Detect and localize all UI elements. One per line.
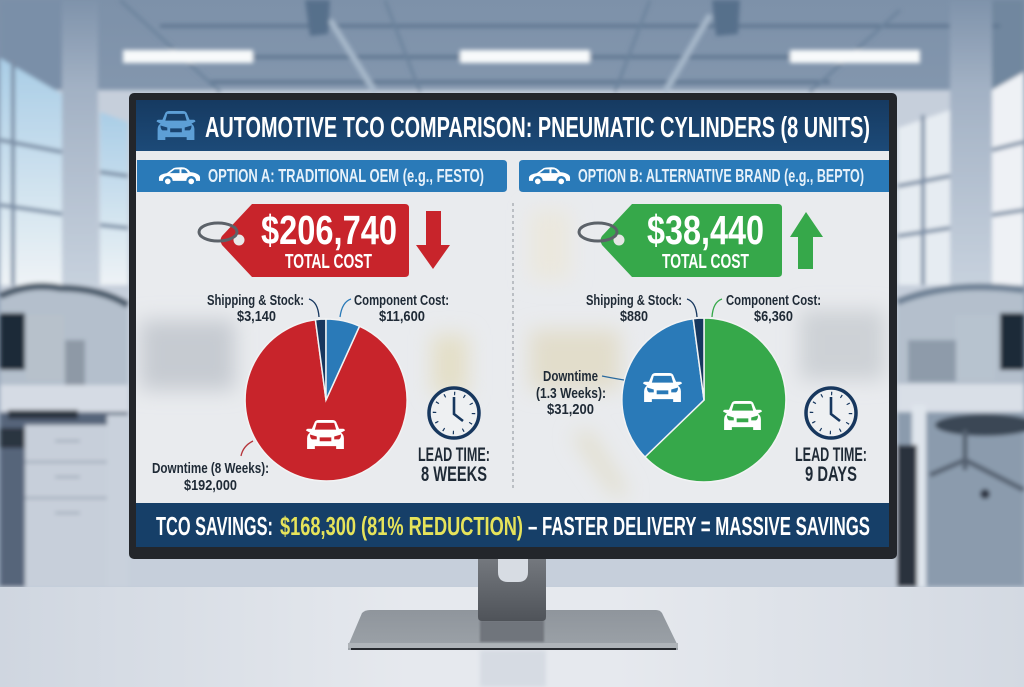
desk surface: [0, 587, 1024, 687]
pie B labels: Component Cost:: [726, 293, 821, 309]
pie A labels: Component Cost:: [354, 293, 449, 309]
pie B labels: $880: [620, 309, 648, 325]
clock A: [429, 388, 479, 438]
pie chart A: [245, 319, 407, 481]
monitor stand and base: [348, 559, 678, 650]
clock B: [806, 388, 856, 438]
lead time B: [795, 445, 867, 486]
pie A labels: $3,140: [237, 309, 276, 325]
lead time A: LEAD TIME:: [418, 445, 490, 466]
icon: sedan A: [159, 167, 200, 185]
panel header: option B: [519, 160, 889, 192]
icon: car front: [157, 111, 195, 140]
screen background: blurred assembly line: [136, 151, 889, 503]
price tag A: $206,740: [261, 207, 397, 253]
pie A labels: $192,000: [184, 478, 237, 494]
pie B labels: [536, 293, 821, 418]
pie chart B: [622, 318, 786, 482]
pie B labels: (1.3 Weeks):: [536, 386, 606, 402]
lead time A: 8 WEEKS: [421, 463, 487, 486]
panel header: option A: [137, 160, 507, 192]
icon: car in pie A: [306, 420, 345, 449]
price tag B: $38,440: [647, 207, 764, 253]
option B label: OPTION B: ALTERNATIVE BRAND (e.g., BEPTO): [578, 166, 864, 186]
pie A labels: [152, 293, 449, 494]
pie A labels: Downtime (8 Weeks):: [152, 461, 269, 477]
windows: [0, 58, 62, 285]
pie A labels: $11,600: [379, 309, 425, 325]
pie B labels: Downtime: [543, 369, 598, 385]
monitor bezel: [129, 93, 897, 559]
cars and monitors: [0, 285, 128, 385]
arrow up: [790, 212, 823, 269]
icon: sedan B: [529, 167, 570, 185]
price tag B: TOTAL COST: [662, 251, 749, 273]
lead time A: [418, 445, 490, 486]
pie B labels: $31,200: [547, 402, 594, 418]
price tag B: [579, 204, 782, 277]
savings banner: $168,300 (81% REDUCTION): [280, 511, 523, 541]
price tag A: [199, 204, 409, 277]
icon: car in blue slice: [643, 373, 682, 402]
price tag A: TOTAL COST: [285, 251, 372, 273]
title banner: [136, 100, 889, 151]
pie A labels: Shipping & Stock:: [207, 293, 304, 309]
lead time B: LEAD TIME:: [795, 445, 867, 466]
pie B labels: $6,360: [754, 309, 793, 325]
option A label: OPTION A: TRADITIONAL OEM (e.g., FESTO): [208, 166, 484, 186]
arrow down: [416, 211, 450, 269]
pie B labels: Shipping & Stock:: [586, 293, 682, 309]
savings banner: TCO SAVINGS:: [156, 511, 273, 541]
icon: car in green slice: [723, 401, 762, 430]
lead time B: 9 DAYS: [805, 463, 857, 486]
savings banner: [136, 503, 889, 547]
